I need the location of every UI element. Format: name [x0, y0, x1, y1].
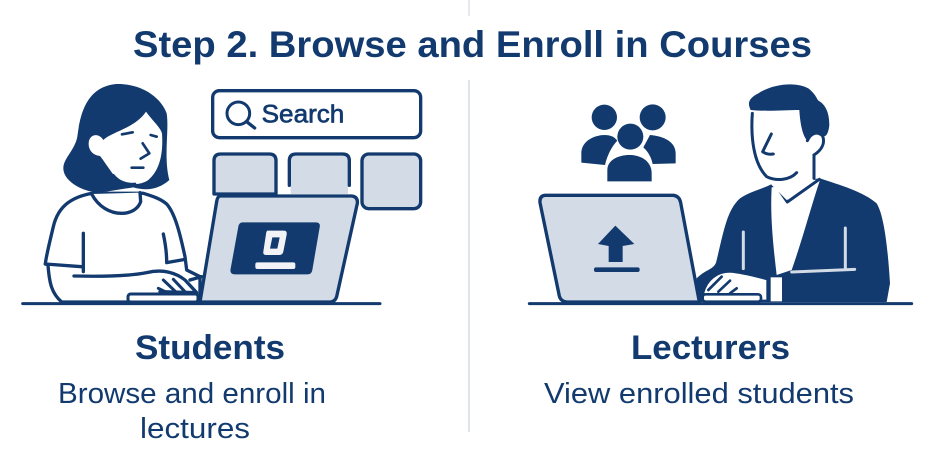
text: lecturers description: View enrolled students — [544, 378, 854, 410]
title: Step 2. Browse and Enroll in Courses — [133, 24, 812, 65]
torso — [45, 193, 200, 302]
panel: lecturers illustration — [529, 84, 912, 304]
keyboard — [703, 294, 761, 302]
hair — [749, 84, 829, 141]
course tiles — [214, 154, 421, 209]
icon: upload arrow — [598, 226, 634, 262]
search bar: Search — [262, 102, 344, 129]
heading: lecturers: Lecturers — [631, 329, 790, 367]
hand and cuff — [703, 272, 767, 301]
hair — [63, 84, 169, 193]
text: students description — [58, 378, 326, 445]
student figure — [45, 84, 202, 302]
panel: students illustration — [23, 84, 421, 304]
face — [89, 112, 162, 184]
desk line — [23, 299, 380, 308]
lecturer figure — [697, 84, 890, 302]
icon: group of people — [581, 104, 676, 181]
neck and face — [752, 108, 825, 200]
search bar — [213, 91, 421, 138]
text: students description: lectures — [140, 413, 250, 445]
desk line — [529, 299, 912, 308]
heading: students: Students — [135, 329, 285, 367]
keyboard — [128, 294, 198, 302]
text: students description: Browse and enroll in — [58, 378, 326, 410]
laptop — [200, 196, 357, 302]
laptop — [540, 195, 699, 302]
